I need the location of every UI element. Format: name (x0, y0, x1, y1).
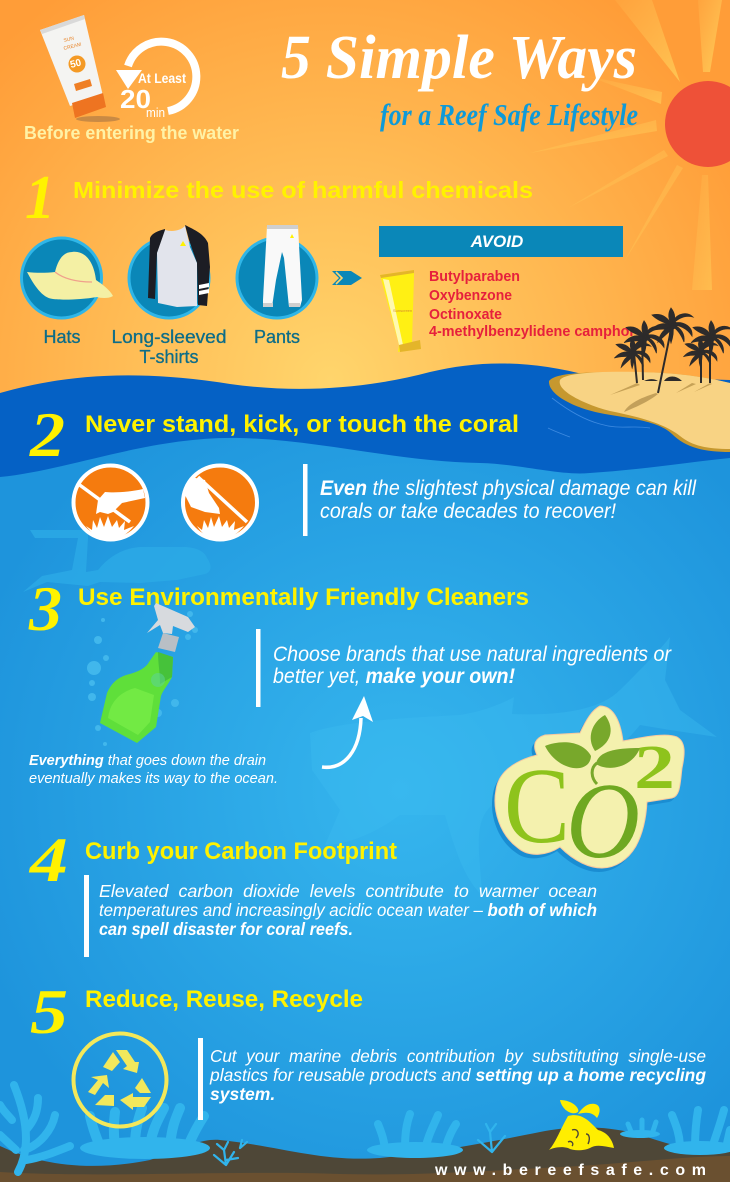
step 4 body text: can spell disaster for coral reefs. (99, 919, 353, 939)
divider bar step 2 (303, 464, 308, 536)
no touching icon (74, 466, 148, 540)
step 5 number: 5 (30, 976, 68, 1047)
website url: www.bereefsafe.com (434, 1162, 706, 1179)
step 1 heading: Minimize the use of harmful chemicals (73, 177, 533, 203)
timer arrow: at least 20 min: min (146, 105, 165, 120)
step 4 body text (99, 881, 597, 939)
sunscreen tube: CREAM (63, 42, 82, 52)
yellow tube (380, 270, 421, 352)
divider bar step 5 (198, 1038, 203, 1120)
CO2 badge (492, 706, 684, 881)
background: light sea (0, 438, 730, 1182)
timer arrow: at least 20 min (116, 42, 196, 120)
step 4 body text: temperatures and increasingly acidic ocean water – both of which (99, 900, 597, 920)
clothing icon: hat (22, 238, 113, 318)
timer arrow: at least 20 min: At Least (138, 70, 186, 86)
spray bottle with bubbles (87, 603, 198, 746)
CO2 badge: O (566, 762, 640, 881)
recycle icon (74, 1034, 166, 1126)
step 4 number: 4 (29, 824, 68, 895)
clothing icon: pants (237, 225, 317, 318)
step 2 body text (320, 477, 697, 523)
step 5 body text (209, 1046, 706, 1104)
step 3 body text: better yet, make your own! (273, 665, 515, 688)
divider bar step 4 (84, 875, 89, 957)
step 3 number: 3 (28, 573, 62, 644)
subtitle: for a Reef Safe Lifestyle (380, 97, 638, 132)
sunscreen tube (40, 15, 120, 122)
drain note: Everything that goes down the drain (29, 752, 266, 769)
drain note (29, 752, 278, 787)
clothing labels (43, 327, 300, 367)
clothing labels: T-shirts (139, 347, 199, 367)
reef corals (0, 1085, 730, 1172)
clothing labels: Pants (254, 327, 300, 347)
chevron arrow (332, 271, 362, 285)
step 5 body text: system. (210, 1084, 275, 1104)
step 2 heading: Never stand, kick, or touch the coral (85, 411, 519, 438)
step 1 number: 1 (25, 164, 55, 232)
diver silhouette (23, 530, 211, 592)
clothing labels: Long-sleeved (112, 327, 226, 347)
step 5 heading: Reduce, Reuse, Recycle (85, 986, 363, 1013)
no kicking icon (183, 466, 257, 540)
drain note: eventually makes its way to the ocean. (29, 770, 278, 787)
timer arrow: at least 20 min: 20 (120, 84, 151, 114)
sunscreen tube: SUN (63, 35, 75, 44)
step 3 heading: Use Environmentally Friendly Cleaners (78, 584, 529, 611)
step 5 body text: plastics for reusable products and setting up a home recycling (209, 1065, 706, 1085)
CO2 badge: 2 (634, 734, 675, 802)
list of harmful chemicals: Butylparaben (429, 268, 520, 285)
clothing icon: long-sleeved t-shirt (129, 225, 210, 318)
turtle logo (549, 1100, 614, 1150)
step 3 body text: Choose brands that use natural ingredients or (273, 643, 672, 666)
CO2 badge: C (504, 747, 570, 866)
avoid banner (379, 226, 623, 257)
list of harmful chemicals (429, 268, 635, 340)
list of harmful chemicals: 4-methylbenzylidene camphor (429, 323, 635, 340)
step 5 body text: Cut your marine debris contribution by substituting single-use (210, 1046, 706, 1066)
step 4 heading: Curb your Carbon Footprint (85, 838, 397, 865)
small corals (214, 1124, 505, 1165)
step 4 body text: Elevated carbon dioxide levels contribute to warmer ocean (99, 881, 597, 901)
step 2 body text: Even the slightest physical damage can kill (320, 477, 697, 500)
background: sky (0, 0, 730, 480)
background: deep water wave (0, 363, 730, 480)
clothing labels: Hats (43, 327, 81, 347)
sea bed (0, 1127, 730, 1182)
dolphin silhouette (310, 637, 717, 895)
title: 5 Simple Ways (281, 24, 637, 92)
sun with rays (530, 0, 730, 290)
caption: before entering the water: Before entering the water (24, 122, 239, 143)
list of harmful chemicals: Octinoxate (429, 306, 502, 323)
list of harmful chemicals: Oxybenzone (429, 287, 512, 304)
divider bar step 3 (256, 629, 260, 707)
sunscreen tube: 50 (69, 57, 83, 71)
avoid banner: AVOID (470, 232, 523, 251)
step 3 body text (273, 643, 672, 688)
step 2 number: 2 (29, 399, 65, 470)
island with palm trees (548, 308, 730, 452)
yellow tube: Sunscreen (393, 308, 412, 313)
curved arrow (322, 696, 373, 767)
step 2 body text: corals or take decades to recover! (320, 500, 616, 523)
